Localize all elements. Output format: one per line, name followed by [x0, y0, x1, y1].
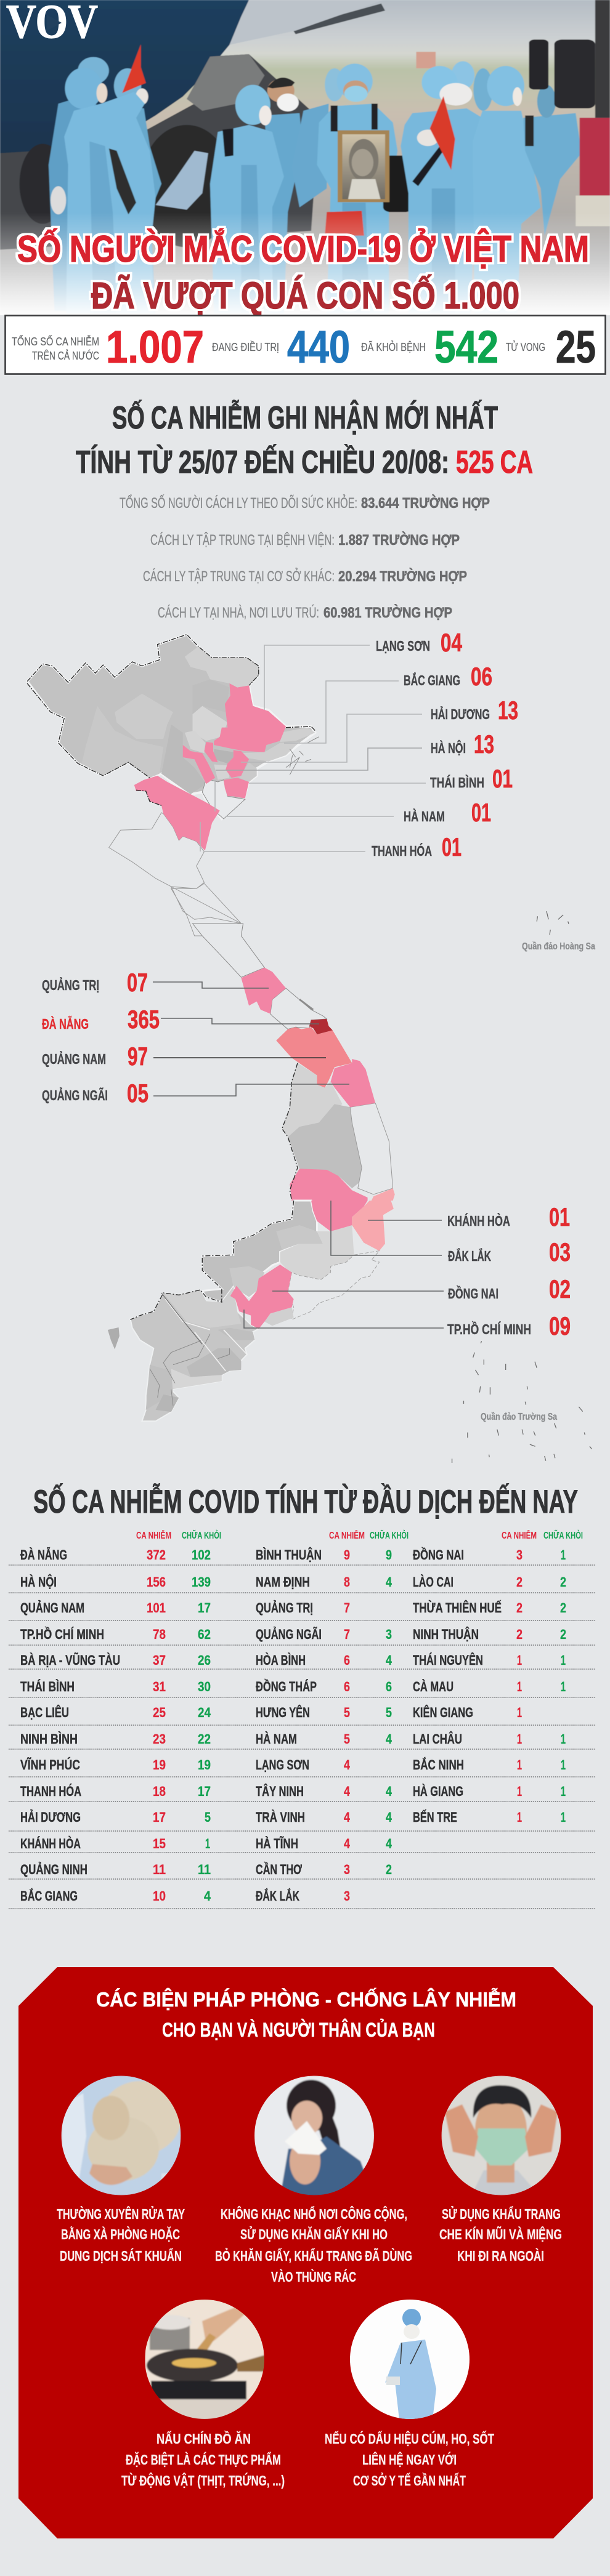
callout: Lạng Sơn: 04: [441, 628, 462, 657]
table column 1: 372: [147, 1547, 166, 1563]
table column 2: 4: [386, 1731, 392, 1747]
text: wear face mask: CHE KÍN MŨI VÀ MIỆNG: [439, 2226, 562, 2242]
callout: Bắc Giang: [284, 662, 492, 743]
callouts: northern provinces: [200, 628, 518, 861]
callout: Hà Nam: HÀ NAM: [404, 808, 445, 824]
table column 2: 7: [344, 1627, 350, 1642]
callout: Đắk Lắk: 03: [549, 1238, 571, 1266]
recovered stat: ĐÃ KHỎI BỆNH: [361, 340, 426, 353]
callout: TP.Hồ Chí Minh: 09: [549, 1311, 571, 1340]
total cases stat: 1.007: [106, 321, 204, 372]
table column 1: 5: [205, 1809, 211, 1825]
table column 1: HÀ NỘI: [20, 1574, 57, 1590]
table column 1: 4: [204, 1888, 211, 1904]
table column 3: 2: [560, 1574, 566, 1590]
text: contact medical facility: LIÊN HỆ NGAY VỚI: [362, 2451, 457, 2468]
deaths stat: 25: [556, 321, 596, 372]
text: cook food: NẤU CHÍN ĐỒ ĂN: [157, 2430, 251, 2447]
table column 2: 4: [386, 1809, 392, 1825]
map: central region: [192, 924, 395, 1201]
heading: new cases: TÍNH TỪ 25/07 ĐẾN CHIỀU 20/08:: [76, 444, 449, 480]
text: cook food: TỪ ĐỘNG VẬT (THỊT, TRỨNG, ...): [121, 2472, 285, 2489]
table column 2: HÀ TĨNH: [256, 1836, 298, 1851]
flag: left Vietnamese flag: [122, 44, 146, 93]
map: Ha Long bay islands: [286, 737, 319, 775]
table column 2: QUẢNG TRỊ: [256, 1600, 313, 1616]
under treatment stat: [212, 321, 350, 372]
quarantine figures: TỔNG SỐ NGƯỜI CÁCH LY THEO DÕI SỨC KHỎE:: [120, 494, 357, 512]
table column 3: 2: [560, 1600, 566, 1616]
callout: Lạng Sơn: LẠNG SƠN: [376, 638, 430, 654]
table column 3: BẾN TRE: [413, 1809, 457, 1825]
table column 1: QUẢNG NINH: [20, 1862, 87, 1877]
table column 2: 8: [344, 1574, 350, 1590]
callout: Bắc Giang: 06: [471, 662, 492, 691]
callout: Quảng Nam: [42, 1042, 326, 1071]
callout: Khánh Hòa: KHÁNH HÒA: [447, 1212, 510, 1229]
total cases stat: TỔNG SỐ CA NHIỄM: [12, 335, 99, 348]
table column 1: 25: [153, 1705, 166, 1720]
table column 1: VĨNH PHÚC: [20, 1757, 80, 1773]
panel heading: [96, 1987, 516, 2041]
map of Vietnam: [27, 635, 595, 1463]
person: right figure with flag: [401, 66, 482, 313]
hero photo: medical team in blue suits: [0, 0, 610, 317]
map: Nghe An, Ha Tinh outline: [109, 813, 204, 888]
callout: Quảng Ngãi: QUẢNG NGÃI: [42, 1086, 108, 1103]
recovered stat: [361, 321, 498, 372]
table column 1: 11: [153, 1862, 166, 1877]
table column 1: 17: [198, 1784, 211, 1799]
callout: Hải Dương: HẢI DƯƠNG: [431, 705, 490, 722]
table column 3: 1: [517, 1757, 522, 1773]
callout: Thanh Hóa: 01: [442, 832, 462, 861]
table column 2: CẦN THƠ: [256, 1862, 302, 1877]
table column 3: CÀ MAU: [413, 1679, 453, 1694]
table column 3: LÀO CAI: [413, 1574, 453, 1590]
quarantine figures: 1.887 TRƯỜNG HỢP: [338, 531, 460, 549]
map: northern region: [27, 635, 569, 936]
table column 2: 3: [386, 1627, 392, 1642]
table column 3: 1: [517, 1784, 522, 1799]
table column headers: [136, 1530, 583, 1541]
truck and mirrors: [529, 0, 610, 226]
title: ĐÃ VƯỢT QUÁ CON SỐ 1.000: [91, 275, 519, 316]
table column 2: ĐẮK LẮK: [256, 1888, 299, 1904]
table column 2: 4: [386, 1836, 392, 1851]
map: northern border: [27, 635, 259, 685]
table column 1: ĐÀ NẴNG: [20, 1547, 67, 1563]
table column 2: 9: [386, 1547, 392, 1563]
table column 1: 19: [198, 1757, 211, 1773]
table column 2: QUẢNG NGÃI: [256, 1627, 322, 1642]
callout: Hà Nam: 01: [471, 798, 491, 827]
table column 1: TP.HỒ CHÍ MINH: [20, 1627, 104, 1642]
table column 1: [20, 1547, 211, 1904]
table column 1: 139: [192, 1574, 211, 1590]
table column 1: HẢI DƯƠNG: [20, 1809, 81, 1825]
table column 3: 2: [516, 1574, 523, 1590]
quarantine figures: CÁCH LY TẬP TRUNG TẠI BỆNH VIỆN:: [150, 532, 335, 549]
text: contact medical facility: [325, 2430, 494, 2489]
table column 3: [413, 1547, 566, 1825]
deaths stat: TỬ VONG: [506, 340, 545, 353]
callout: Đồng Nai: [272, 1274, 571, 1303]
table column 1: 37: [153, 1652, 166, 1668]
table column 3: 1: [517, 1679, 522, 1694]
text: wear face mask: [439, 2205, 562, 2264]
callout: Quảng Ngãi: [42, 1079, 349, 1108]
callouts: southern provinces: [244, 1201, 571, 1340]
person: back hoods right group: [451, 62, 493, 111]
table column 1: 17: [153, 1809, 166, 1825]
callout: Khánh Hòa: 01: [549, 1202, 570, 1231]
text: no spitting, tissue: KHÔNG KHẠC NHỔ NƠI CÔNG CỘNG,: [221, 2205, 407, 2222]
quarantine figures: 60.981 TRƯỜNG HỢP: [323, 604, 452, 621]
table column 1: 30: [198, 1679, 211, 1694]
table column 3: 1: [517, 1731, 522, 1747]
callout: Thái Bình: THÁI BÌNH: [430, 774, 484, 791]
table column 1: 18: [153, 1784, 166, 1799]
table column 3: KIÊN GIANG: [413, 1705, 473, 1720]
table column headers: CA NHIỄM: [136, 1531, 171, 1541]
table column 3: LAI CHÂU: [413, 1731, 462, 1747]
callout: Lạng Sơn: [264, 628, 462, 710]
callout: Đồng Nai: 02: [549, 1274, 571, 1303]
quarantine figures: CÁCH LY TẠI NHÀ, NƠI LƯU TRÚ:: [158, 605, 319, 621]
table column 2: 5: [344, 1731, 350, 1747]
table column 3: 1: [517, 1705, 522, 1720]
person: main left figure with raised arm: [51, 68, 156, 313]
person: center figure with portrait: [317, 63, 412, 313]
table column 1: THANH HÓA: [20, 1784, 81, 1799]
icon: cooking photo: [145, 2299, 265, 2420]
callout: Đắk Lắk: ĐẮK LẮK: [448, 1247, 491, 1264]
table column 3: 2: [516, 1600, 523, 1616]
table column 2: 3: [344, 1862, 350, 1877]
callout: Quảng Trị: QUẢNG TRỊ: [42, 976, 99, 993]
table column 1: KHÁNH HÒA: [20, 1836, 81, 1851]
table column 2: ĐỒNG THÁP: [256, 1679, 317, 1694]
table column 1: 1: [205, 1836, 210, 1851]
table column 2: 4: [386, 1652, 392, 1668]
text: wear face mask: SỬ DỤNG KHẨU TRANG: [442, 2205, 561, 2222]
flag: right Vietnamese flag: [430, 96, 455, 170]
map: southern region: [108, 1201, 592, 1463]
table column 2: 5: [386, 1705, 392, 1720]
panel: prevention measures: [18, 1967, 593, 2538]
person: third left figure: [113, 68, 161, 313]
map: Mekong delta: [130, 1287, 259, 1421]
quarantine figures: CÁCH LY TẬP TRUNG TẠI CƠ SỞ KHÁC:: [143, 567, 335, 585]
table column 3: 1: [561, 1679, 566, 1694]
table column 2: 4: [344, 1809, 350, 1825]
table column 1: 26: [198, 1652, 211, 1668]
table column 1: THÁI BÌNH: [20, 1679, 75, 1694]
callout: Đà Nẵng: ĐÀ NẴNG: [42, 1015, 89, 1032]
table column 2: TÂY NINH: [256, 1784, 304, 1799]
table column 3: 1: [561, 1809, 566, 1825]
table column 2: 7: [344, 1600, 350, 1616]
portrait frame: [338, 131, 389, 202]
table column 2: 3: [344, 1888, 350, 1904]
table column 3: 1: [561, 1547, 566, 1563]
table column 1: 102: [192, 1547, 211, 1563]
text: hand washing: DUNG DỊCH SÁT KHUẨN: [60, 2247, 182, 2264]
heading: new cases: [76, 400, 533, 480]
text: hand washing: BẰNG XÀ PHÒNG HOẶC: [61, 2226, 180, 2242]
table column 2: 2: [386, 1862, 392, 1877]
table column 2: BÌNH THUẬN: [256, 1547, 322, 1563]
map: white coastal provinces: [202, 779, 245, 819]
map: Truong Sa islands: [452, 1341, 592, 1463]
table column headers: CHỮA KHỎI: [370, 1530, 409, 1541]
table column 2: 5: [344, 1705, 350, 1720]
icon: hand washing photo: [61, 2075, 186, 2198]
total cases stat: [12, 321, 204, 372]
callout: Thanh Hóa: THANH HÓA: [372, 842, 432, 859]
text: contact medical facility: NẾU CÓ DẤU HIỆU CÚM, HO, SỐT: [325, 2430, 494, 2447]
table column 2: 6: [386, 1679, 392, 1694]
callout: TP.Hồ Chí Minh: TP.HỒ CHÍ MINH: [447, 1321, 531, 1337]
callout: Đà Nẵng: [42, 1005, 319, 1034]
table column 2: 6: [344, 1679, 350, 1694]
table column headers: CA NHIỄM: [329, 1531, 365, 1541]
callout: Hà Nội: [216, 730, 494, 770]
table column 1: 19: [153, 1757, 166, 1773]
table column 2: HÀ NAM: [256, 1731, 297, 1747]
table column 1: 31: [153, 1679, 166, 1694]
callout: Đà Nẵng: 365: [128, 1005, 160, 1034]
heading: new cases: 525 CA: [456, 445, 533, 480]
table column 1: 11: [198, 1862, 211, 1877]
callout: Hải Dương: [241, 696, 518, 762]
stats box: [5, 315, 605, 374]
table column 2: HƯNG YÊN: [256, 1705, 310, 1720]
table column 1: 62: [198, 1627, 211, 1642]
table column 1: BẠC LIÊU: [20, 1705, 69, 1720]
quarantine figures: [120, 494, 490, 621]
icon: doctor photo: [350, 2299, 470, 2420]
callout: Khánh Hòa: [368, 1202, 570, 1231]
table column 1: 10: [153, 1888, 166, 1904]
table column 2: HÒA BÌNH: [256, 1652, 306, 1668]
table column 1: BẮC GIANG: [20, 1888, 78, 1904]
person: far-left back figure: [49, 57, 109, 311]
table column 2: [256, 1547, 392, 1904]
person: center-left figure: [210, 85, 284, 313]
quarantine figures: 20.294 TRƯỜNG HỢP: [338, 568, 467, 585]
map: highlighted northern provinces: [134, 683, 286, 851]
callout: Quảng Nam: 97: [128, 1042, 148, 1071]
text: wear face mask: KHI ĐI RA NGOÀI: [457, 2247, 544, 2264]
table column 3: 1: [561, 1784, 566, 1799]
table column 2: 4: [344, 1757, 350, 1773]
callout: Hà Nội: HÀ NỘI: [431, 739, 466, 756]
red bag: [325, 211, 364, 236]
table column 1: 15: [153, 1836, 166, 1851]
under treatment stat: ĐANG ĐIỀU TRỊ: [212, 340, 279, 353]
table column 3: 1: [561, 1652, 566, 1668]
callout: Quảng Ngãi: 05: [127, 1079, 148, 1108]
table column 3: 1: [517, 1809, 522, 1825]
text: no spitting, tissue: SỬ DỤNG KHĂN GIẤY KHI HO: [240, 2225, 388, 2242]
case table: [9, 1530, 596, 1909]
panel heading: CÁC BIỆN PHÁP PHÒNG - CHỐNG LÂY NHIỄM: [96, 1987, 516, 2011]
table column 2: 4: [344, 1836, 350, 1851]
table column 2: 9: [344, 1547, 350, 1563]
callout: Quảng Trị: [42, 968, 269, 997]
table column 1: 78: [153, 1627, 166, 1642]
table column 1: BÀ RỊA - VŨNG TÀU: [20, 1652, 120, 1668]
table column 1: 156: [147, 1574, 166, 1590]
callout: Hà Nam: [215, 780, 491, 827]
callout: Quảng Nam: QUẢNG NAM: [42, 1050, 106, 1067]
icon: man with face mask photo: [441, 2075, 561, 2196]
table column 3: 1: [561, 1731, 566, 1747]
table column 2: 4: [344, 1784, 350, 1799]
table column 1: 23: [153, 1731, 166, 1747]
quarantine figures: 83.644 TRƯỜNG HỢP: [361, 494, 490, 512]
table column 2: 4: [386, 1574, 392, 1590]
callout: Bắc Giang: BẮC GIANG: [404, 672, 460, 688]
text: cook food: [121, 2430, 285, 2489]
title: [17, 228, 589, 316]
text: no spitting, tissue: [215, 2205, 412, 2285]
table column 2: 4: [386, 1784, 392, 1799]
callout: Đồng Nai: ĐỒNG NAI: [448, 1285, 498, 1302]
table column headers: CHỮA KHỎI: [543, 1530, 583, 1541]
table column 1: 22: [198, 1731, 211, 1747]
callout: Quảng Trị: 07: [127, 968, 148, 997]
table column headers: CA NHIỄM: [502, 1531, 537, 1541]
backpack: [156, 151, 208, 210]
recovered stat: 542: [434, 321, 498, 372]
table column 3: 1: [561, 1757, 566, 1773]
table column 3: BẮC NINH: [413, 1757, 464, 1773]
table column 3: 3: [516, 1547, 523, 1563]
table column 3: THÁI NGUYÊN: [413, 1652, 483, 1668]
panel heading: CHO BẠN VÀ NGƯỜI THÂN CỦA BẠN: [162, 2019, 435, 2041]
icon: woman with tissue photo: [254, 2075, 375, 2196]
table column 1: 101: [147, 1600, 166, 1616]
table column 3: 2: [516, 1627, 523, 1642]
callout: Thái Bình: [249, 764, 513, 793]
callout: Thanh Hóa: [200, 822, 462, 861]
table column 1: QUẢNG NAM: [20, 1600, 84, 1616]
deaths stat: [506, 321, 596, 372]
table column 3: 1: [517, 1652, 522, 1668]
table column 2: 6: [344, 1652, 350, 1668]
table column 3: NINH THUẬN: [413, 1627, 479, 1642]
callout: TP.Hồ Chí Minh: [244, 1310, 571, 1340]
table column headers: CHỮA KHỎI: [182, 1530, 221, 1541]
under treatment stat: 440: [287, 321, 350, 372]
table column 2: LẠNG SƠN: [256, 1757, 309, 1773]
table column 2: TRÀ VINH: [256, 1809, 305, 1825]
text: hand washing: THƯỜNG XUYÊN RỬA TAY: [57, 2205, 185, 2222]
person: far-right figure: [523, 85, 582, 236]
callouts: central provinces: [42, 968, 349, 1108]
table column 3: 2: [560, 1627, 566, 1642]
person: man with white mask: [264, 78, 301, 302]
map: Hoang Sa dots: [537, 911, 569, 935]
callout: Hải Dương: 13: [498, 696, 518, 725]
text: cook food: ĐẶC BIỆT LÀ CÁC THỰC PHẨM: [126, 2451, 281, 2468]
table column 2: NAM ĐỊNH: [256, 1574, 310, 1590]
callout: Đắk Lắk: [331, 1201, 571, 1266]
table column 1: 24: [198, 1705, 211, 1720]
text: no spitting, tissue: BỎ KHĂN GIẤY, KHẨU TRANG ĐÃ DÙNG: [215, 2247, 412, 2264]
person: figure second right: [473, 66, 541, 313]
callout: Thái Bình: 01: [492, 764, 513, 793]
callout: Hà Nội: 13: [474, 730, 494, 759]
text: hand washing: [57, 2205, 185, 2264]
table column 1: NINH BÌNH: [20, 1731, 78, 1747]
table column 3: ĐỒNG NAI: [413, 1547, 464, 1563]
text: no spitting, tissue: VÀO THÙNG RÁC: [271, 2268, 356, 2285]
table column 3: THỪA THIÊN HUẾ: [413, 1600, 502, 1616]
text: contact medical facility: CƠ SỞ Y TẾ GẦN NHẤT: [353, 2471, 466, 2489]
table column 3: HÀ GIANG: [413, 1784, 463, 1799]
person: back figure by center: [291, 68, 344, 207]
table column 1: 17: [198, 1600, 211, 1616]
total cases stat: TRÊN CẢ NƯỚC: [32, 349, 99, 362]
map: Truong Sa label: Quần đảo Trường Sa: [481, 1412, 557, 1422]
